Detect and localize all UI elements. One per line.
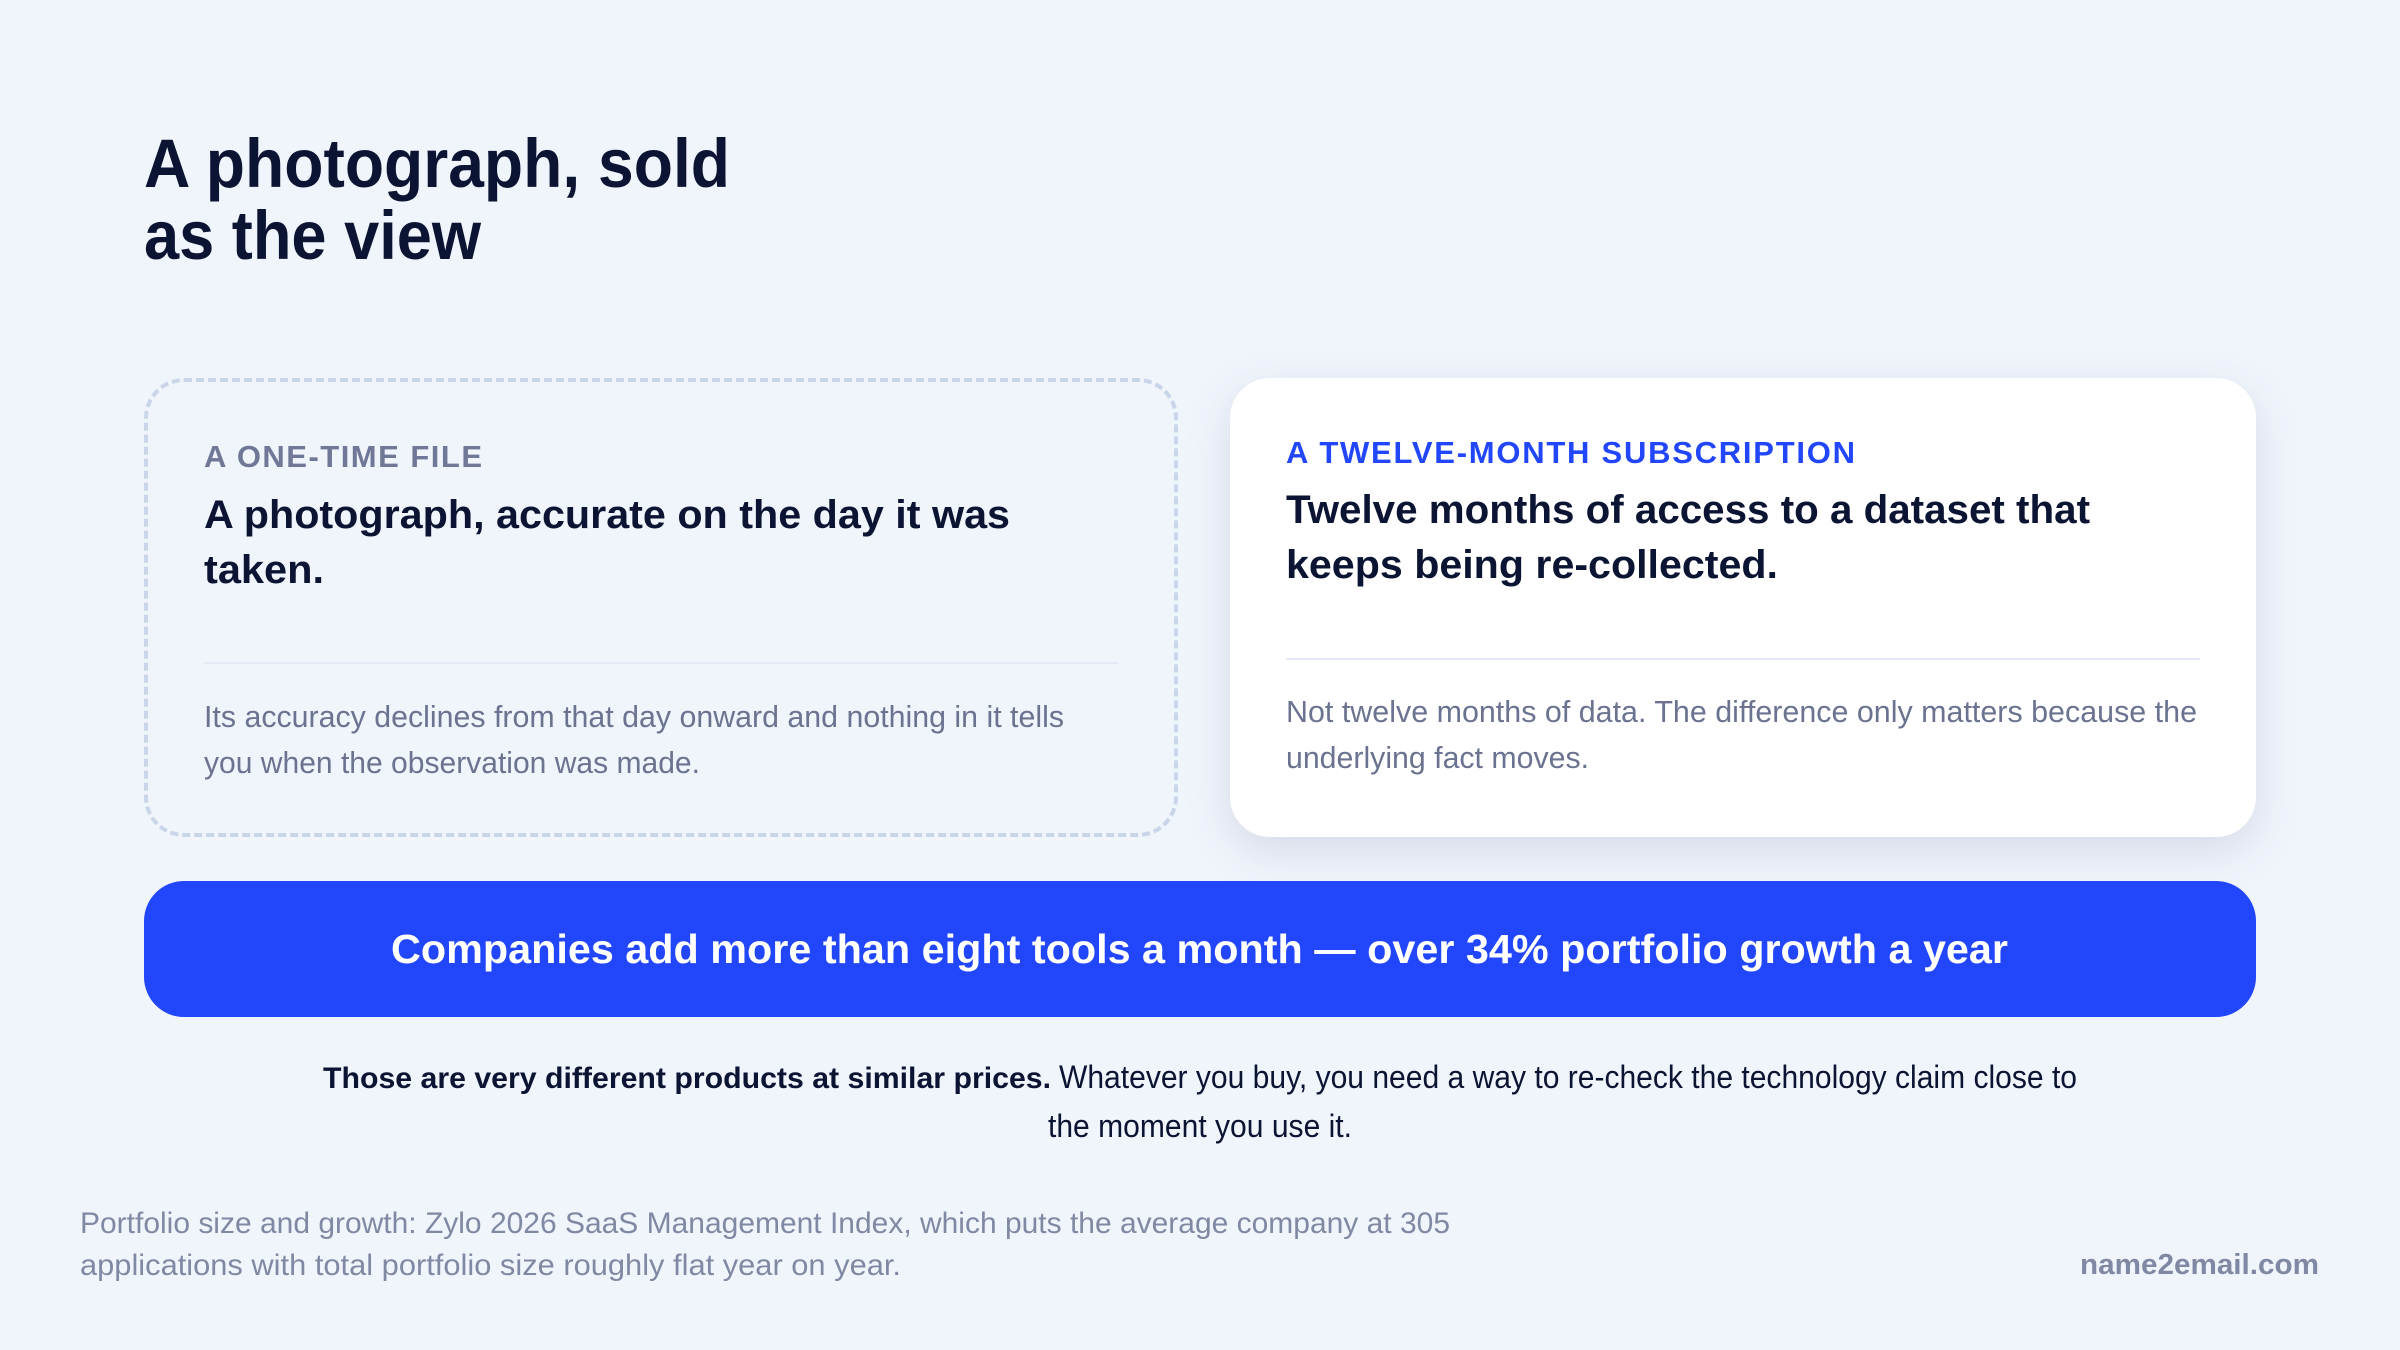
body: not twelve months of data: Not twelve months of data. The difference only matters because the — [1286, 694, 2197, 729]
panel: twelve-month subscription — [1230, 378, 2256, 837]
panel card — [1230, 378, 2256, 837]
panel: one-time file — [146, 380, 1176, 835]
heading: twelve months of access: keeps being re-collected. — [1286, 543, 1778, 587]
banner — [144, 881, 2256, 1017]
body: not twelve months of data: underlying fact moves. — [1286, 740, 1589, 775]
label: a one-time file: A ONE-TIME FILE — [204, 439, 482, 474]
body: its accuracy declines — [204, 699, 1064, 780]
takeaway note: Those are very different products at similar prices. — [323, 1062, 1051, 1095]
banner text: Companies add more than eight tools a month — over 34% portfolio growth a year — [391, 926, 2008, 972]
brand: name2email.com — [2080, 1249, 2319, 1281]
heading: a photograph: A photograph, accurate on the day it was — [204, 493, 1010, 537]
title: as the view — [144, 197, 481, 274]
source footnote: applications with total portfolio size roughly flat year on year. — [80, 1249, 901, 1282]
label: a twelve-month subscription: A TWELVE-MONTH SUBSCRIPTION — [1286, 435, 1855, 470]
panel outline: dashed — [146, 380, 1176, 835]
heading: twelve months of access: Twelve months of access to a dataset that — [1286, 488, 2090, 532]
source footnote: Portfolio size and growth: Zylo 2026 SaaS Management Index, which puts the average company at 305 — [80, 1207, 1450, 1240]
body: not twelve months of data — [1286, 694, 2197, 775]
body: its accuracy declines: you when the observation was made. — [204, 745, 700, 780]
title — [144, 125, 730, 274]
takeaway note: Whatever you buy, you need a way to re-check the technology claim close to — [1059, 1059, 2077, 1095]
title: A photograph, sold — [144, 125, 730, 202]
takeaway note: the moment you use it. — [1048, 1108, 1352, 1144]
source footnote — [80, 1207, 1450, 1282]
heading: a photograph: taken. — [204, 548, 324, 592]
body: its accuracy declines: Its accuracy declines from that day onward and nothing in it tells — [204, 699, 1064, 734]
heading: twelve months of access — [1286, 488, 2090, 587]
takeaway note — [323, 1059, 2077, 1144]
heading: a photograph — [204, 493, 1010, 592]
